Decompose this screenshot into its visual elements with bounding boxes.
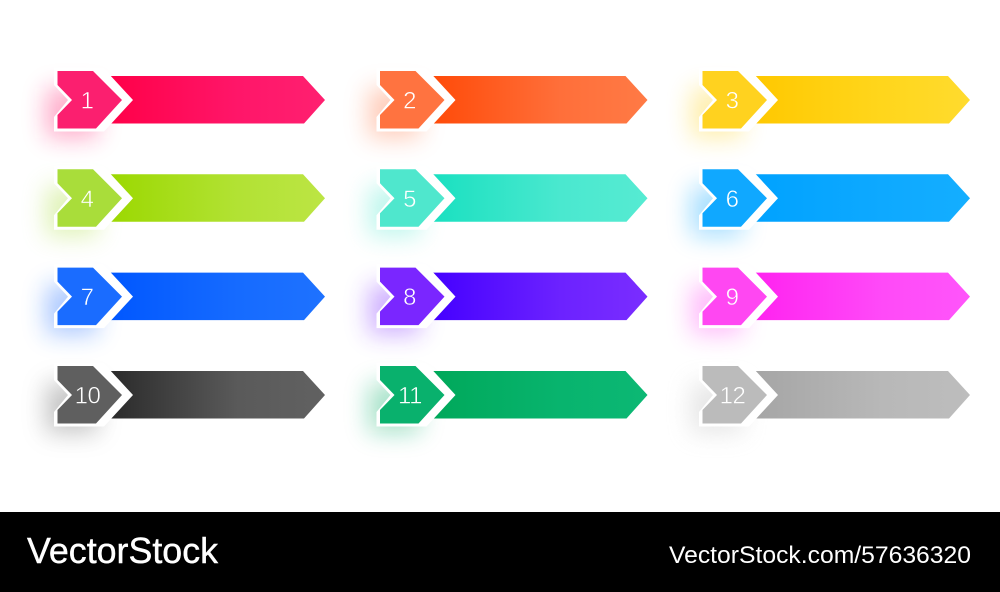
badge outline xyxy=(376,166,456,230)
badge outline xyxy=(699,362,778,426)
glow xyxy=(46,88,98,138)
glow xyxy=(691,285,743,335)
badge outline xyxy=(54,362,133,426)
banner 5 xyxy=(368,166,648,236)
badge xyxy=(380,71,444,128)
badge xyxy=(702,71,767,128)
arrow bar xyxy=(753,371,970,418)
badge xyxy=(380,169,444,227)
arrow bar xyxy=(430,273,648,320)
badge outline xyxy=(376,264,456,328)
number: 9 xyxy=(726,284,739,311)
badge outline xyxy=(699,264,778,328)
number: 10 xyxy=(75,382,100,410)
glow xyxy=(691,186,743,236)
badge outline xyxy=(54,166,133,230)
banner 2 xyxy=(368,68,648,138)
glow xyxy=(46,186,98,236)
glow xyxy=(368,383,420,433)
banner 11 xyxy=(368,362,648,433)
number: 11 xyxy=(398,382,422,410)
glow xyxy=(691,88,743,138)
banner 9 xyxy=(691,264,970,335)
badge xyxy=(702,366,767,424)
glow xyxy=(691,383,743,433)
number: 2 xyxy=(403,88,416,114)
glow xyxy=(368,285,420,335)
arrow bar xyxy=(753,76,970,124)
glow xyxy=(368,88,420,138)
banner 12 xyxy=(691,362,970,433)
banner 1 xyxy=(46,68,325,138)
banner 7 xyxy=(46,264,325,335)
arrow bar xyxy=(108,273,325,320)
footer image id: VectorStock.com/57636320 xyxy=(669,542,971,569)
arrow bar xyxy=(430,174,648,222)
number: 4 xyxy=(81,186,94,213)
number: 5 xyxy=(403,186,416,213)
badge xyxy=(58,169,122,227)
glow xyxy=(46,285,98,335)
number: 7 xyxy=(81,284,94,311)
number: 6 xyxy=(726,186,739,213)
banner 10 xyxy=(46,362,325,433)
arrow bar xyxy=(753,174,970,222)
arrow bar xyxy=(753,273,970,320)
arrow bar xyxy=(430,371,648,418)
glow xyxy=(368,186,420,236)
arrow bar xyxy=(108,76,325,124)
badge outline xyxy=(54,264,133,328)
badge outline xyxy=(699,166,778,230)
number: 3 xyxy=(726,88,739,114)
arrow bar xyxy=(430,76,648,124)
footer logo text: VectorStock xyxy=(27,530,219,571)
banner 6 xyxy=(691,166,970,236)
badge outline xyxy=(54,68,133,132)
arrow bar xyxy=(108,371,325,418)
badge xyxy=(380,366,444,424)
footer band xyxy=(0,512,1000,592)
banner 4 xyxy=(46,166,325,236)
badge outline xyxy=(376,362,456,426)
arrow bar xyxy=(108,174,325,222)
badge xyxy=(702,268,767,325)
badge xyxy=(58,268,122,325)
number: 12 xyxy=(720,382,745,410)
badge xyxy=(702,169,767,227)
banner 8 xyxy=(368,264,648,335)
number: 1 xyxy=(81,88,94,114)
badge xyxy=(58,366,122,424)
badge xyxy=(380,268,444,325)
badge xyxy=(58,71,122,128)
badge outline xyxy=(699,68,778,132)
banner 3 xyxy=(691,68,970,138)
badge outline xyxy=(376,68,456,132)
number: 8 xyxy=(403,284,416,311)
glow xyxy=(46,383,98,433)
